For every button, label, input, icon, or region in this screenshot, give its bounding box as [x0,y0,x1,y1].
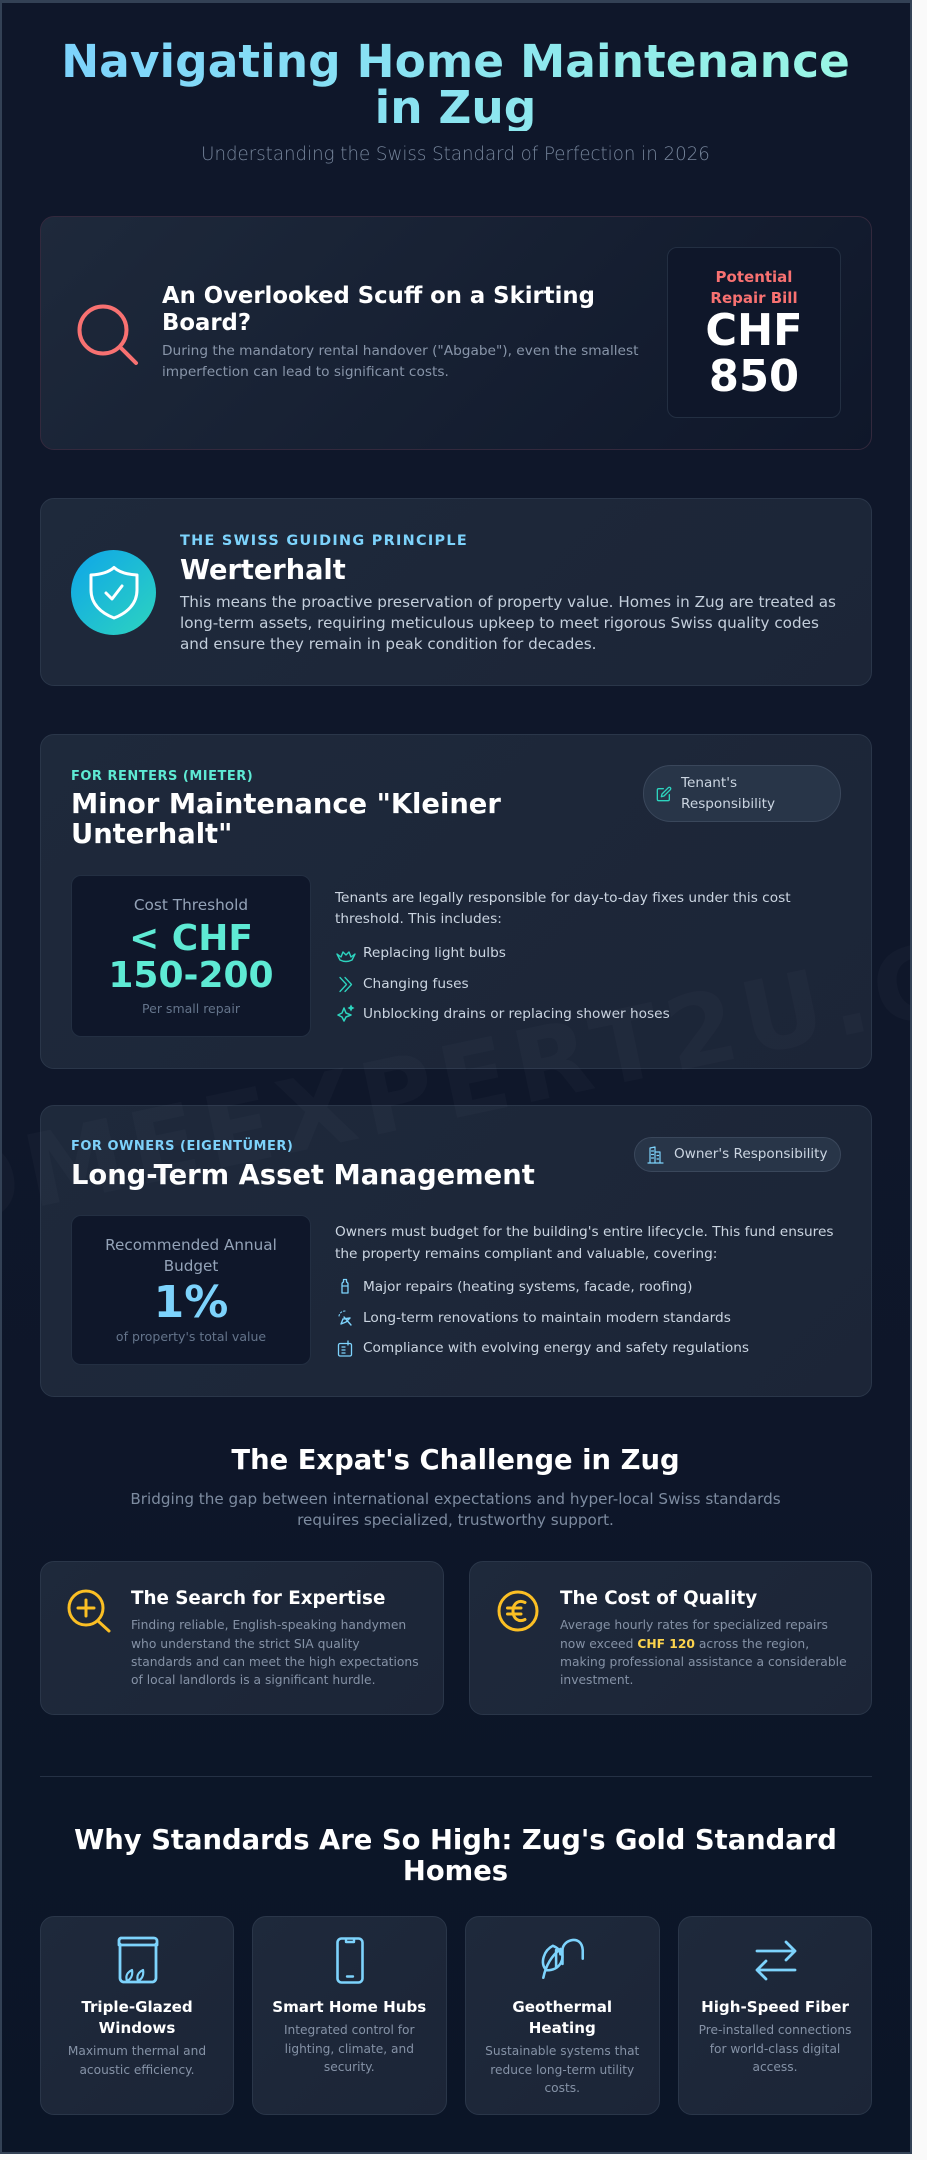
description [162,343,638,380]
stat value [108,918,274,996]
feature text: for world-class digital [710,2042,840,2056]
feature text [485,2044,639,2095]
description: imperfection can lead to significant costs. [162,364,449,380]
subtitle: Understanding the Swiss Standard of Perfection in 2026 [201,144,710,165]
description [335,1224,834,1262]
stat label [105,1236,277,1275]
stat label: Cost Threshold [134,896,248,914]
stat note: Per small repair [142,1001,240,1016]
responsibility pill [643,765,841,822]
feature title [512,1998,612,2037]
section heading: gold standard: Homes [403,1856,508,1886]
feature text [68,2044,206,2077]
eyebrow label: FOR OWNERS (EIGENTÜMER) [71,1139,293,1154]
feature title: Windows [99,2019,175,2037]
card text: investment. [560,1673,633,1687]
heading: Minor Maintenance "Kleiner [71,789,501,820]
panel: cost of quality [468,1561,872,1715]
feature title: Smart Home Hubs [272,1998,426,2016]
feature text: Maximum thermal and [68,2044,206,2058]
card text [131,1618,419,1687]
stat value: < CHF [129,918,253,959]
feature card: windows [40,1916,234,2115]
heading: Werterhalt [180,554,346,586]
stat label: Repair Bill [710,289,798,307]
feature text: security. [324,2060,375,2074]
eyebrow label: THE SWISS GUIDING PRINCIPLE [180,532,468,548]
section heading: expat challenge: The Expat's Challenge in Zug [231,1445,680,1476]
feature card: geothermal [465,1916,660,2115]
icon: document [338,1340,352,1357]
list item: Long-term renovations to maintain modern standards [363,1310,731,1326]
pill text: Tenant's [681,774,737,790]
section heading: gold standard [74,1825,837,1886]
card heading: The Search for Expertise [131,1588,385,1608]
feature text: costs. [544,2081,580,2095]
stat box: annual budget [71,1215,311,1365]
icon: shield check [71,550,156,635]
description: Tenants are legally responsible for day-to-day fixes under this cost [335,890,791,906]
feature text: Integrated control for [284,2023,415,2037]
icon: magnifier plus [68,1590,111,1633]
list item: Compliance with evolving energy and safety regulations [363,1340,749,1356]
section heading: gold standard: Why Standards Are So High: Zug's Gold Standard [74,1825,837,1856]
description [180,592,836,653]
icon: magnifying glass [78,304,138,366]
description: threshold. This includes: [335,910,502,926]
icon: bottle [341,1278,349,1294]
feature title: Triple-Glazed [81,1998,193,2016]
feature card: smart home [252,1916,446,2115]
stat label: Budget [164,1257,218,1275]
icon: swap arrows [756,1940,796,1980]
description: This means the proactive preservation of property value. Homes in Zug are treated as [180,592,836,610]
feature text [284,2023,415,2074]
panel: for owners [40,1105,872,1397]
stat label [710,268,798,307]
stat value: 1% [154,1277,228,1328]
panel: overlooked scuff [40,216,872,450]
stat label: Recommended Annual [105,1236,277,1254]
heading [71,789,501,850]
card text: now exceed CHF 120 across the region, [560,1637,809,1651]
heading: An Overlooked Scuff on a Skirting [162,282,595,308]
description [334,890,791,926]
heading [162,282,595,336]
stat value: 850 [709,352,799,402]
feature text: reduce long-term utility [490,2063,634,2077]
icon: building [647,1146,664,1164]
feature text [699,2023,851,2074]
icon: sparkle [337,1004,354,1022]
list item: Unblocking drains or replacing shower hoses [363,1006,670,1022]
icon: euro coin [498,1590,538,1632]
stat note: of property's total value [116,1329,266,1344]
feature title: Geothermal [512,1998,612,2016]
list item: Changing fuses [363,976,469,992]
heading: Board? [162,310,251,336]
description: Owners must budget for the building's entire lifecycle. This fund ensures [335,1224,834,1240]
list item: Replacing light bulbs [363,945,506,961]
section subtitle: Bridging the gap between international expectations and hyper-local Swiss standards [130,1490,781,1508]
card heading: The Cost of Quality [560,1588,757,1608]
card text [560,1618,847,1687]
stat label: Potential [716,268,792,286]
pill text: Responsibility [681,796,775,812]
icon: window [118,1936,158,1984]
stat value: CHF [705,306,803,356]
eyebrow label: FOR RENTERS (MIETER) [71,769,253,784]
section subtitle: requires specialized, trustworthy support. [297,1511,614,1529]
description: and ensure they remain in peak condition for decades. [180,635,596,653]
description: long-term assets, requiring meticulous upkeep to meet rigorous Swiss quality codes [180,614,819,632]
feature text: acoustic efficiency. [79,2063,195,2077]
icon: phone [336,1937,364,1984]
feature title [81,1998,193,2037]
description: During the mandatory rental handover ("Abgabe"), even the smallest [162,343,638,359]
card text: Average hourly rates for specialized repairs [560,1618,828,1632]
icon: double chevron [339,976,352,992]
card text: making professional assistance a considerable [560,1655,847,1669]
section subtitle [130,1490,781,1529]
card text: Finding reliable, English-speaking handymen [131,1618,406,1632]
heading: Long-Term Asset Management [71,1160,535,1191]
feature title: Heating [529,2019,596,2037]
pill text: Owner's Responsibility [674,1146,828,1162]
stat box: cost threshold [71,875,311,1037]
feature text: access. [753,2060,797,2074]
icon: tools [338,1310,352,1326]
feature text: Pre-installed connections [699,2023,851,2037]
icon: leaf and arch [542,1938,584,1979]
feature text: lighting, climate, and [285,2042,414,2056]
panel: for renters [40,734,872,1069]
description: the property remains compliant and valuable, covering: [335,1246,717,1262]
card text: standards and can meet the high expectations [131,1655,419,1669]
panel: Werterhalt [40,498,872,686]
stat value [705,306,803,402]
feature text: Sustainable systems that [485,2044,639,2058]
card text: of local landlords is a significant hurdle. [131,1673,375,1687]
stat value: 150-200 [108,955,274,996]
feature card: fiber [678,1916,872,2115]
title: Navigating Home Maintenance [61,35,850,88]
feature title: High-Speed Fiber [701,1998,849,2016]
title: in Zug [375,81,536,134]
panel: search for expertise [40,1561,444,1715]
icon: crown [336,951,356,962]
title [61,35,850,134]
heading: Unterhalt" [71,819,232,850]
pill text [680,774,775,812]
list item: Major repairs (heating systems, facade, roofing) [363,1279,692,1295]
card text: who understand the strict SIA quality [131,1637,360,1651]
stat box: repair bill [667,247,841,418]
responsibility pill [634,1137,841,1172]
icon: pencil [656,786,672,802]
